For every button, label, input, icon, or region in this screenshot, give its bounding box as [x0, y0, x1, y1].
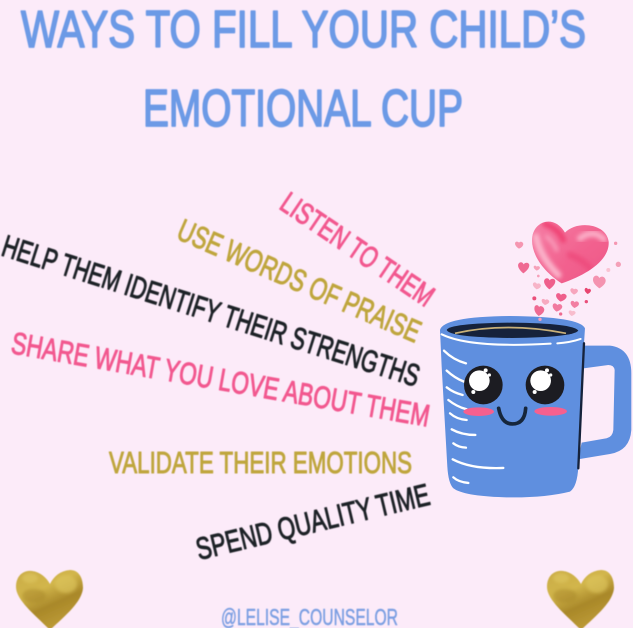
right eye	[526, 366, 564, 404]
list of ways	[0, 186, 440, 567]
blush cheeks	[463, 407, 567, 416]
small floating hearts	[515, 242, 621, 321]
mug rim and side highlights	[442, 334, 581, 483]
item: spend quality time: SPEND QUALITY TIME	[192, 477, 433, 567]
item: share what you love about them: SHARE WHAT YOU LOVE ABOUT THEM	[9, 325, 432, 434]
mug dark edge	[578, 343, 584, 468]
item: validate their emotions: VALIDATE THEIR EMOTIONS	[109, 445, 412, 480]
coffee highlight	[455, 327, 566, 333]
title: EMOTIONAL CUP	[143, 80, 463, 138]
icon: smiling blue mug with hearts	[440, 222, 631, 497]
left eye	[464, 366, 503, 404]
mug handle	[578, 346, 631, 459]
item: help them identify their strengths: HELP THEM IDENTIFY THEIR STRENGTHS	[0, 228, 424, 394]
coffee inside mug	[447, 323, 578, 338]
smile	[499, 408, 526, 424]
large pink heart	[532, 222, 609, 283]
mug body	[440, 316, 585, 497]
title	[21, 1, 586, 138]
icon: gold heart left	[16, 570, 83, 628]
item: use words of praise: USE WORDS OF PRAISE	[172, 212, 426, 349]
icon: gold heart right	[547, 570, 614, 628]
item: listen to them: LISTEN TO THEM	[274, 186, 440, 313]
